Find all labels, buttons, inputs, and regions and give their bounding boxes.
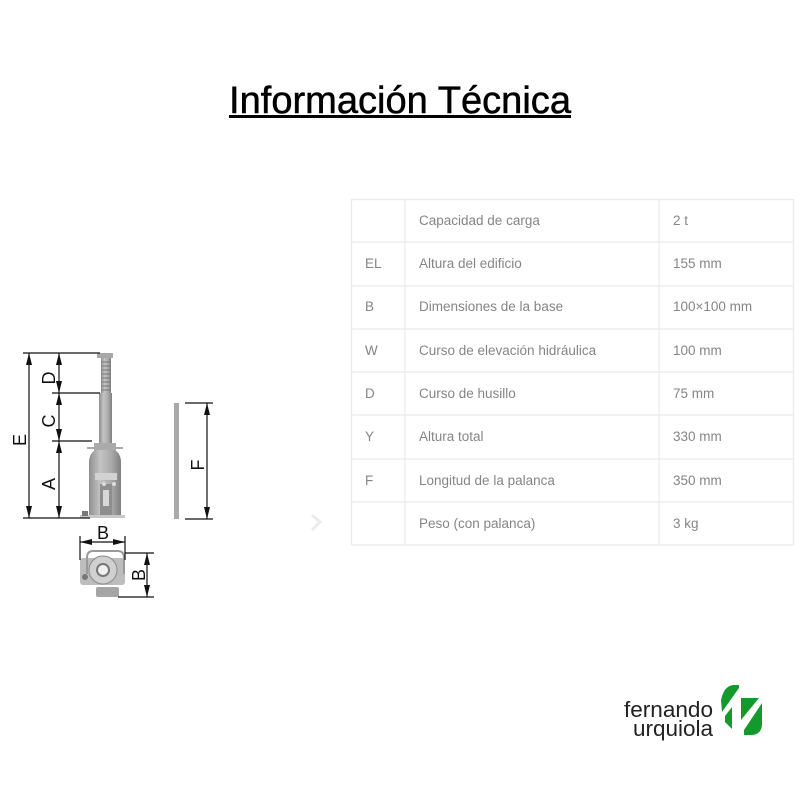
row: base: B [365,299,374,314]
row: husillo [365,386,714,401]
dimension labels [10,372,59,490]
logo [624,685,762,741]
row: base: Dimensiones de la base [419,299,563,314]
diagram: jack top view: B [97,523,109,543]
logo text [624,697,714,741]
diagram: jack top view [80,523,154,597]
row: husillo: Curso de husillo [419,386,516,401]
dimension lines [23,353,100,518]
row: palanca: Longitud de la palanca [419,473,555,488]
row: husillo: D [365,386,375,401]
row: elevacion: Curso de elevación hidráulica [419,343,597,358]
jack body [80,353,125,518]
row: peso [419,516,699,531]
row: husillo: 75 mm [673,386,714,401]
dimension labels: C [39,414,59,428]
diagram: jack top view: B [129,569,149,581]
dimension labels: A [39,478,59,490]
diagram: lever: F [188,460,208,470]
specifications table [352,200,794,545]
diagram: jack side view [10,353,125,518]
row: capacidad [419,213,688,228]
row: palanca: 350 mm [673,473,722,488]
logo mark [721,685,762,735]
row: altura edificio: Altura del edificio [419,256,522,271]
row: altura edificio: EL [365,256,382,271]
row: palanca [365,473,722,488]
row: peso: Peso (con palanca) [419,516,535,531]
title: Información Técnica [229,80,572,122]
dimension labels: D [39,372,59,384]
logo text: urquiola [633,716,714,741]
row: base [365,299,752,314]
logo text: fernando [624,697,713,722]
row: capacidad: Capacidad de carga [419,213,540,228]
row: altura total [365,429,722,444]
row: base: 100×100 mm [673,299,752,314]
row: altura total: Altura total [419,429,484,444]
dimension labels: E [10,434,30,446]
icon: chevron [312,515,320,530]
row: altura edificio [365,256,722,271]
row: elevacion: 100 mm [673,343,722,358]
row: peso: 3 kg [673,516,699,531]
row: palanca: F [365,473,373,488]
row: elevacion: W [365,343,378,358]
row: capacidad: 2 t [673,213,688,228]
diagram: lever [174,403,213,519]
row: altura total: 330 mm [673,429,722,444]
row: altura edificio: 155 mm [673,256,722,271]
row: altura total: Y [365,429,374,444]
row: elevacion [365,343,722,358]
